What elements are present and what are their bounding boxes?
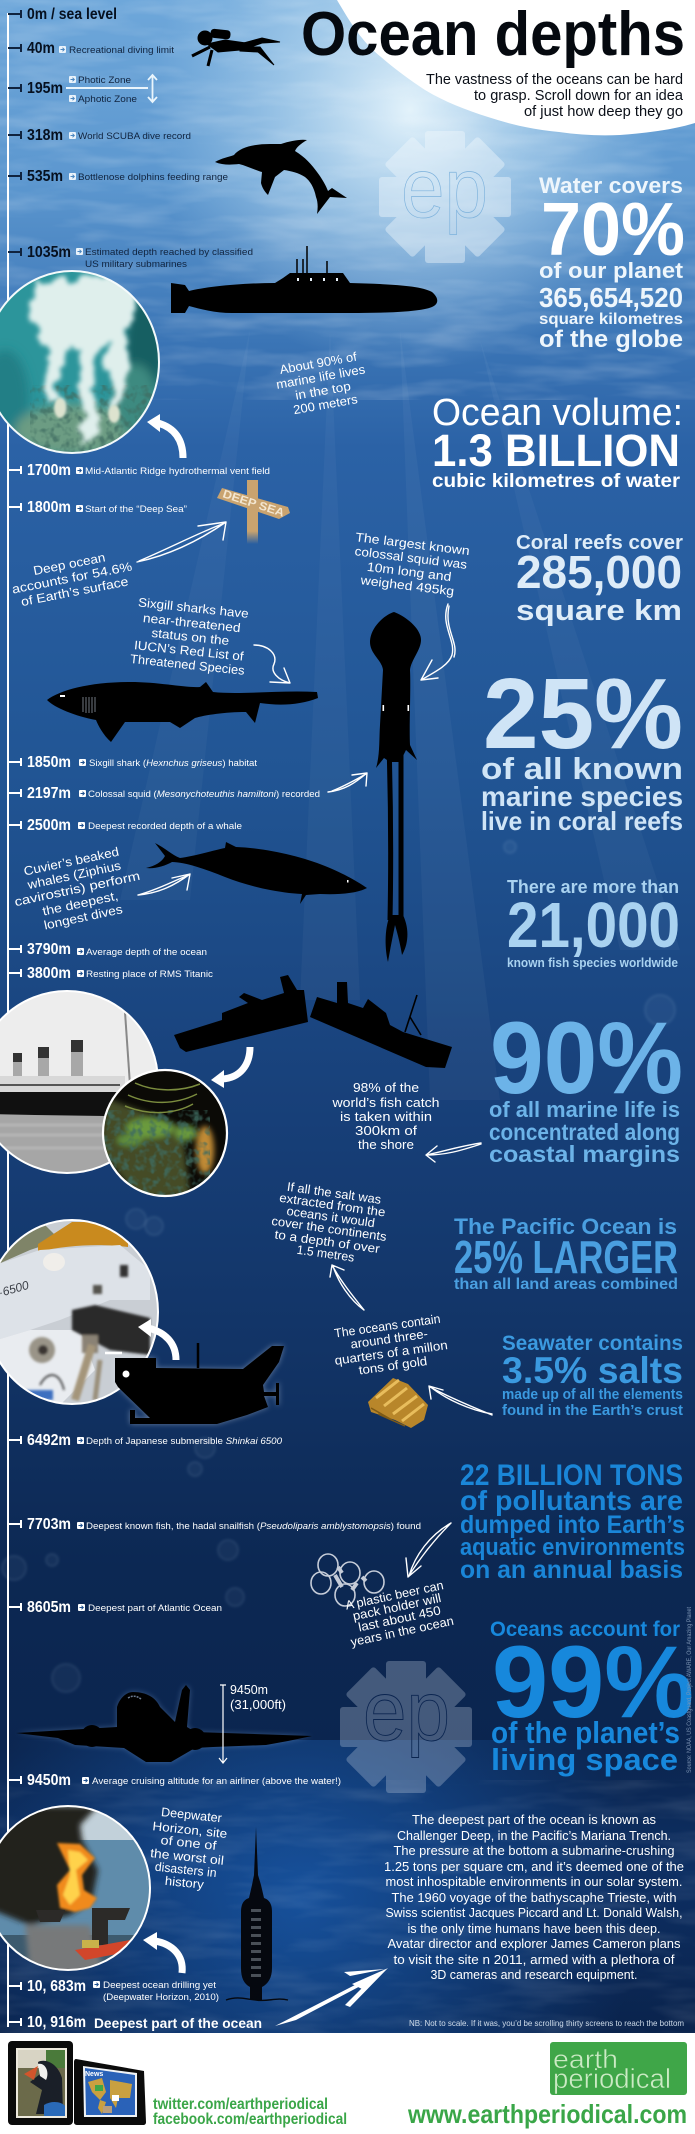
note: plastic holder: A plastic beer can	[344, 1578, 445, 1613]
label 10,916m	[8, 2014, 262, 2031]
stat: seawater salts: found in the Earth’s crust	[502, 1403, 683, 1419]
label 6492m	[8, 1432, 283, 1449]
note: Deepwater Horizon: the worst oil	[150, 1846, 225, 1868]
stat: 21,000 fish species: known fish species worldwide	[507, 955, 678, 970]
label 9450m: 9450m	[27, 1772, 71, 1789]
note: sixgill sharks: IUCN’s Red List of	[133, 638, 245, 664]
watermark logo bottom	[340, 1661, 472, 1793]
stat: seawater salts: made up of all the elements	[502, 1387, 683, 1403]
subtitle: of just how deep they go	[524, 104, 683, 120]
label 3800m	[8, 965, 213, 982]
note: fish catch: the shore	[358, 1138, 414, 1152]
label 8605m: 8605m	[27, 1599, 71, 1616]
note: plastic holder: years in the ocean	[349, 1614, 455, 1649]
text block: Challenger Deep: 1.25 tons per square cm, and it’s deemed one of the	[384, 1859, 684, 1874]
note: marine life top 200m: About 90% of	[279, 350, 358, 377]
stat: 99% living space: 99%	[492, 1625, 694, 1739]
label 3800m: 3800m	[27, 965, 71, 982]
watermark logo top	[379, 131, 511, 263]
note: fish catch: 98% of the	[353, 1081, 419, 1095]
label 2197m: Colossal squid (Mesonychoteuthis hamiltoni) recorded	[88, 789, 320, 800]
label 1850m: Sixgill shark (Hexnchus griseus) habitat	[89, 758, 257, 769]
note: deep ocean: accounts for 54.6%	[11, 559, 133, 597]
label 9450m: Average cruising altitude for an airliner (above the water!)	[92, 1776, 341, 1787]
note: colossal squid: 10m long and	[366, 560, 452, 584]
arrow: squid record	[328, 773, 367, 792]
note: oceans gold: quarters of a millon	[334, 1338, 449, 1368]
stat: pacific ocean: than all land areas combined	[454, 1276, 678, 1293]
label 40m	[8, 40, 174, 57]
note: Deepwater Horizon: disasters in	[154, 1860, 217, 1880]
stat: water covers 70%: 365,654,520	[539, 282, 683, 313]
label 1700m: Mid-Atlantic Ridge hydrothermal vent field	[85, 466, 270, 477]
label 2197m: 2197m	[27, 785, 71, 802]
icon: tablet map: News	[85, 2071, 103, 2078]
stat: pollutants	[460, 1459, 685, 1584]
note: marine life top 200m: in the top	[294, 379, 352, 403]
note: plastic holder: last about 450	[357, 1603, 442, 1634]
stat: ocean volume: 1.3 BILLION	[432, 425, 680, 476]
text block: Challenger Deep: most inhospitable environments in our solar system.	[386, 1874, 682, 1889]
note: colossal squid: The largest known	[355, 530, 471, 558]
label 8605m: Deepest part of Atlantic Ocean	[88, 1603, 222, 1614]
label 1850m	[8, 754, 257, 771]
note: fish catch	[331, 1081, 440, 1152]
note: sixgill sharks	[129, 595, 251, 678]
note: fish catch: world’s fish catch	[331, 1096, 440, 1110]
label 40m: Recreational diving limit	[69, 45, 174, 56]
stat: pollutants: of pollutants are	[460, 1485, 683, 1516]
stat: 90% marine life: concentrated along	[489, 1119, 680, 1145]
note: cuvier's whales: whales (Ziphius	[25, 859, 122, 892]
stat: coral reefs cover: square km	[516, 595, 682, 627]
stat: 99% living space: living space	[491, 1742, 678, 1777]
photo: Shinkai 6500	[0, 1220, 170, 1410]
note: salt extraction: cover the continents	[271, 1214, 387, 1244]
label 2197m	[8, 785, 320, 802]
stat: pollutants: on an annual basis	[460, 1556, 683, 1584]
label 3790m	[8, 941, 207, 958]
stat: coral reefs cover: Coral reefs cover	[516, 532, 683, 554]
label 1035m: US military submarines	[85, 259, 187, 270]
note: Deepwater Horizon: history	[164, 1874, 205, 1892]
note: salt extraction: extracted from the	[278, 1191, 386, 1220]
stat: 21,000 fish species: There are more than	[507, 877, 679, 897]
note: plastic holder	[342, 1578, 455, 1649]
label 9450m	[8, 1772, 341, 1789]
stat: seawater salts: Seawater contains	[502, 1332, 683, 1355]
label 10,916m: Deepest part of the ocean	[94, 2015, 262, 2031]
note: fish catch: is taken within	[340, 1110, 432, 1124]
note: deep ocean	[8, 546, 136, 610]
note: colossal squid: colossal squid was	[354, 544, 468, 572]
note: fish catch: 300km of	[355, 1124, 418, 1138]
stat: pollutants: dumped into Earth’s	[460, 1511, 685, 1539]
label 7703m: Deepest known fish, the hadal snailfish ( Pseudoliparis amblystomopsis ) found	[86, 1521, 421, 1532]
stat: 25% marine species: marine species	[481, 781, 683, 812]
note: marine life top 200m: marine life lives	[275, 362, 366, 392]
stat: water covers 70%	[539, 173, 685, 353]
arrow: deep ocean to sign	[137, 522, 226, 562]
photo: RMS Titanic	[0, 990, 170, 1175]
label 1800m	[8, 499, 187, 516]
note: marine life top 200m	[273, 349, 371, 419]
depth labels group	[8, 6, 421, 2031]
label 3790m: 3790m	[27, 941, 71, 958]
label 8605m	[8, 1599, 222, 1616]
text block: Challenger Deep: Avatar director and explorer James Cameron plans	[388, 1936, 681, 1951]
whale silhouette	[146, 842, 367, 904]
social links: facebook.com/earthperiodical	[153, 2111, 347, 2128]
airplane silhouette	[16, 1685, 312, 1762]
arrow: pollutants to plastic	[406, 1523, 451, 1577]
note: plastic holder: pack holder will	[351, 1591, 442, 1623]
label 1700m: 1700m	[27, 462, 71, 479]
icon: gold bars	[368, 1378, 428, 1428]
stat: coral reefs cover	[516, 532, 683, 627]
label 40m: 40m	[27, 40, 55, 57]
note: sixgill sharks: Threatened Species	[129, 652, 245, 678]
stat: water covers 70%: of our planet	[539, 258, 684, 283]
curved arrow to Deepwater photo	[143, 1932, 182, 1973]
stat: 25% marine species: 25%	[483, 658, 683, 770]
label 6492m: Depth of Japanese submersible Shinkai 6500	[86, 1436, 283, 1447]
stat: pacific ocean	[454, 1214, 678, 1293]
text block: Challenger Deep: is the only time humans have been this deep.	[408, 1921, 660, 1936]
label 2500m	[8, 817, 242, 834]
label 2500m: Deepest recorded depth of a whale	[88, 821, 242, 832]
label 535m	[8, 168, 228, 185]
note: oceans gold: tons of gold	[358, 1354, 428, 1378]
altitude marker: 9450m	[230, 1683, 268, 1697]
label 0m: 0m / sea level	[27, 6, 117, 23]
curved arrow to titanic photos	[211, 1047, 250, 1088]
icon: tablet map	[74, 2059, 146, 2125]
titanic wreck silhouette	[174, 975, 452, 1068]
note: salt extraction: oceans it would	[286, 1204, 376, 1230]
label 1800m: Start of the “Deep Sea”	[85, 504, 187, 515]
label 195m zones	[8, 75, 157, 105]
stat: 99% living space: of the planet’s	[491, 1715, 680, 1750]
label 10,683m: (Deepwater Horizon, 2010)	[103, 1992, 219, 2003]
label 195m zones: Photic Zone	[78, 75, 131, 86]
photo: titanic wreck bow	[100, 1070, 227, 1200]
altitude marker: (31,000ft)	[230, 1698, 286, 1712]
social links	[153, 2096, 347, 2128]
stat: 25% marine species	[481, 658, 683, 836]
label 1035m: Estimated depth reached by classified	[85, 247, 253, 258]
watermark logo bottom: ep	[363, 1664, 450, 1758]
label 318m: World SCUBA dive record	[78, 131, 191, 142]
note: salt extraction: If all the salt was	[286, 1180, 382, 1207]
note: sixgill sharks: status on the	[151, 626, 230, 648]
note: oceans gold: The oceans contain	[333, 1312, 441, 1341]
icon: tablet magazine	[8, 2041, 73, 2125]
earth periodical logo	[550, 2042, 687, 2095]
stat: water covers 70%: square kilometres	[539, 311, 683, 328]
drill probe silhouette	[226, 1827, 288, 2000]
stat: ocean volume: cubic kilometres of water	[432, 471, 681, 492]
label 2500m: 2500m	[27, 817, 71, 834]
label 10,683m: 10, 683m	[27, 1978, 86, 1995]
photo: Deepwater Horizon	[0, 1806, 160, 1975]
label 195m zones: Aphotic Zone	[78, 94, 137, 105]
label 1035m: 1035m	[27, 244, 71, 261]
arrow: squid	[421, 604, 455, 680]
stat: pacific ocean: The Pacific Ocean is	[454, 1214, 677, 1239]
arrow: gold to salt	[330, 1265, 364, 1310]
note: oceans gold	[330, 1311, 450, 1381]
stat: coral reefs cover: 285,000	[516, 546, 682, 598]
social links: twitter.com/earthperiodical	[153, 2096, 328, 2113]
label 10,916m: 10, 916m	[27, 2014, 86, 2031]
squid silhouette	[370, 612, 421, 962]
source note: Source: NOAA, US Coastguard, Project AWARE, Our Amazing Planet	[687, 1607, 693, 1773]
note: colossal squid	[350, 530, 471, 600]
curved arrow to vents	[147, 414, 183, 458]
note: Deepwater Horizon: Horizon, site	[152, 1819, 228, 1841]
icon: plastic can holder	[311, 1554, 384, 1606]
stat: seawater salts	[502, 1332, 683, 1419]
note: sixgill sharks: near-threatened	[142, 611, 241, 635]
label 7703m: 7703m	[27, 1516, 71, 1533]
arrow: to Challenger Deep	[275, 1968, 388, 2026]
note: Deepwater Horizon: Deepwater	[160, 1805, 223, 1825]
label 318m	[8, 127, 191, 144]
note: oceans gold: around three-	[350, 1327, 429, 1351]
submarine silhouette	[171, 246, 437, 313]
text block: Challenger Deep: 3D cameras and research equipment.	[430, 1967, 638, 1982]
label 318m: 318m	[27, 127, 63, 144]
dolphin silhouette	[215, 140, 347, 214]
shark silhouette	[47, 682, 318, 742]
text block: Challenger Deep	[384, 1812, 684, 1982]
note: deep ocean: of Earth’s surface	[20, 574, 130, 609]
label 10,683m: Deepest ocean drilling yet	[103, 1980, 216, 1991]
deep sea signpost	[217, 480, 290, 544]
note: cuvier's whales: cavirostris) perform	[13, 869, 141, 909]
stat: seawater salts: 3.5% salts	[502, 1350, 683, 1391]
subtitle: to grasp. Scroll down for an idea	[474, 88, 684, 104]
stat: 25% marine species: of all known	[481, 751, 683, 786]
earth periodical logo: periodical	[553, 2063, 671, 2094]
text block: Challenger Deep: The 1960 voyage of the bathyscaphe Trieste, with	[392, 1890, 676, 1905]
stat: ocean volume	[432, 392, 683, 492]
curved arrow to Shinkai photo	[138, 1319, 176, 1360]
stat: water covers 70%: 70%	[541, 187, 685, 271]
stat: 90% marine life	[489, 1001, 683, 1167]
text block: Challenger Deep: Swiss scientist Jacques Piccard and Lt. Donald Walsh,	[386, 1905, 682, 1920]
note: deep ocean: Deep ocean	[32, 550, 107, 578]
note: cuvier's whales: longest dives	[43, 902, 124, 933]
note: Deepwater Horizon	[146, 1804, 230, 1894]
stat: 90% marine life: coastal margins	[489, 1141, 680, 1167]
footer panel	[0, 2033, 695, 2134]
label 3790m: Average depth of the ocean	[86, 947, 207, 958]
label 7703m	[8, 1516, 421, 1533]
diver silhouette	[192, 29, 280, 66]
arrow: seawater to gold	[429, 1386, 492, 1415]
label 535m: Bottlenose dolphins feeding range	[78, 172, 228, 183]
watermark logo top: ep	[401, 141, 488, 235]
text block: Challenger Deep: The pressure at the bottom a submarine-crushing	[394, 1843, 674, 1858]
note: cuvier's whales: the deepest,	[41, 889, 119, 919]
label 1850m: 1850m	[27, 754, 71, 771]
label 1700m	[8, 462, 270, 479]
note: colossal squid: weighed 495kg	[359, 573, 455, 599]
label 6492m: 6492m	[27, 1432, 71, 1449]
note: salt extraction: to a depth of over	[274, 1227, 381, 1256]
text block: Challenger Deep: Challenger Deep, in the Pacific’s Mariana Trench.	[397, 1828, 671, 1843]
subtitle	[426, 72, 684, 120]
label 1035m	[8, 244, 253, 270]
depth axis line	[7, 13, 9, 2027]
scale note: NB: Not to scale. If it was, you’d be scrolling thirty screens to reach the bottom	[409, 2018, 684, 2028]
note: cuvier's whales	[7, 841, 147, 937]
note: salt extraction	[267, 1178, 392, 1269]
earth periodical logo: earth	[553, 2044, 618, 2074]
stat: 99% living space: Oceans account for	[490, 1618, 680, 1641]
text block: Challenger Deep: to visit the site n 2011, armed with a plethora of	[394, 1952, 675, 1967]
submersible silhouette	[105, 1343, 284, 1424]
label 1800m: 1800m	[27, 499, 71, 516]
arrow: sharks	[254, 645, 290, 683]
note: Deepwater Horizon: of one of	[160, 1833, 218, 1853]
deep sea signpost: DEEP SEA	[221, 488, 286, 520]
note: sixgill sharks: Sixgill sharks have	[137, 595, 249, 621]
photo: hydrothermal vents	[0, 270, 170, 460]
subtitle: The vastness of the oceans can be hard	[426, 72, 683, 88]
label 3800m: Resting place of RMS Titanic	[86, 969, 213, 980]
text block: Challenger Deep: The deepest part of the ocean is known as	[412, 1812, 656, 1827]
stat: ocean volume: Ocean volume:	[432, 392, 683, 434]
white header curve	[337, 0, 695, 135]
label 195m zones: 195m	[27, 80, 63, 97]
arrow: whale	[138, 874, 190, 895]
label 535m: 535m	[27, 168, 63, 185]
note: cuvier's whales: Cuvier’s beaked	[22, 845, 120, 879]
label 10,683m	[8, 1978, 219, 2003]
stat: water covers 70%: Water covers	[539, 173, 683, 198]
altitude marker	[219, 1683, 286, 1763]
note: marine life top 200m: 200 meters	[292, 392, 359, 417]
note: salt extraction: 1.5 metres	[296, 1243, 355, 1265]
stat: water covers 70%: of the globe	[539, 326, 683, 353]
stat: 90% marine life: 90%	[490, 1001, 683, 1115]
stat: 90% marine life: of all marine life is	[489, 1097, 680, 1122]
stat: 25% marine species: live in coral reefs	[481, 806, 683, 836]
arrow: fish catch	[426, 1143, 481, 1162]
